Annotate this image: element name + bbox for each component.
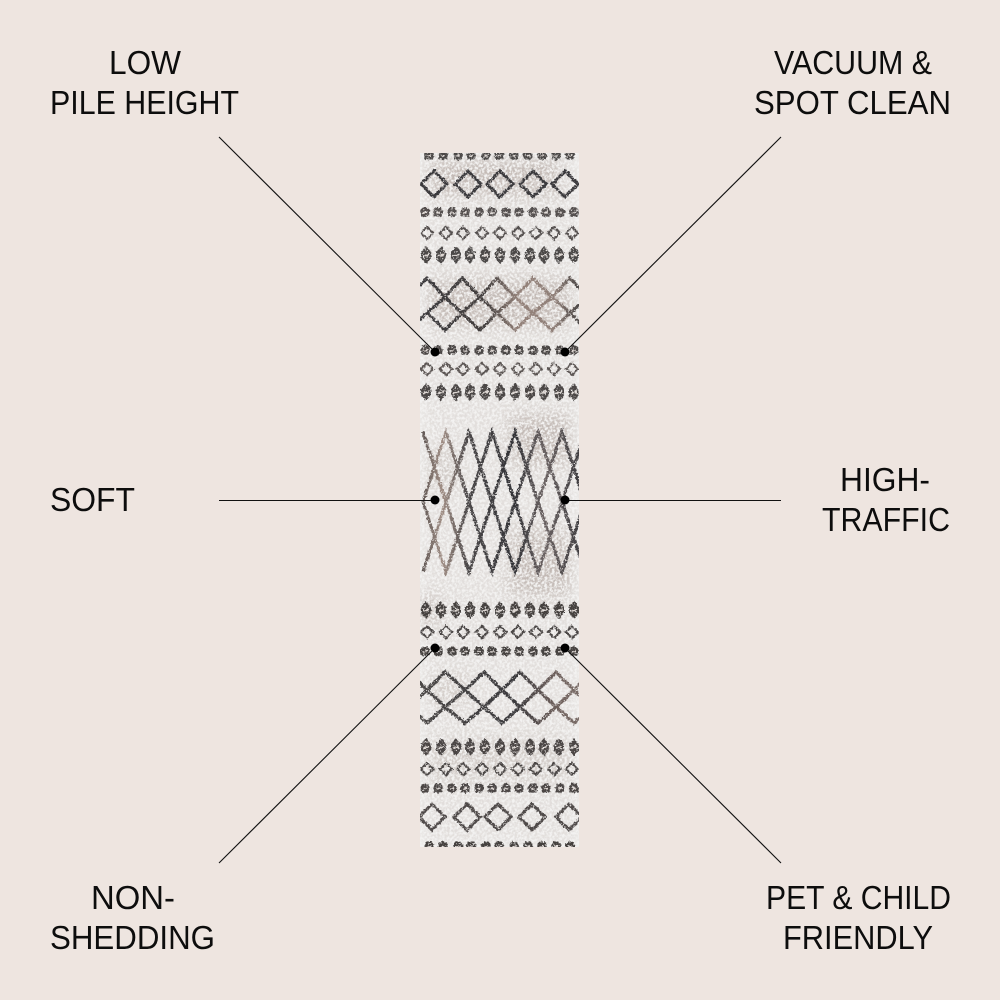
lattice band 2 bbox=[423, 432, 585, 572]
hollow diamonds row 1 bbox=[421, 227, 578, 239]
leader line: low pile height bbox=[219, 137, 440, 356]
bottom edge marks bbox=[424, 840, 576, 847]
dot row 3 bbox=[420, 646, 579, 656]
label: non-shedding bbox=[50, 880, 215, 957]
leader line: non-shedding bbox=[219, 644, 440, 863]
label: high-traffic bbox=[822, 462, 950, 539]
label: high-traffic: TRAFFIC bbox=[822, 502, 950, 539]
label: non-shedding: SHEDDING bbox=[50, 920, 215, 957]
leader line: high-traffic bbox=[560, 496, 781, 504]
lattice band 3 bbox=[409, 672, 592, 723]
dot row 4 bbox=[420, 784, 579, 793]
leader line: soft bbox=[219, 496, 440, 504]
dot row 1 bbox=[420, 208, 579, 217]
filled diamonds row 1 bbox=[421, 246, 579, 264]
label: low pile height: LOW bbox=[109, 45, 181, 82]
label: vacuum and spot clean bbox=[754, 45, 951, 122]
label: vacuum and spot clean: SPOT CLEAN bbox=[754, 85, 951, 122]
label: soft: SOFT bbox=[50, 482, 135, 519]
large diamonds row 1 bbox=[421, 171, 578, 197]
label: pet and child friendly: PET & CHILD bbox=[766, 880, 951, 917]
label: high-traffic: HIGH- bbox=[840, 462, 930, 499]
label: low pile height: PILE HEIGHT bbox=[50, 85, 239, 122]
rug runner bbox=[420, 153, 579, 847]
filled diamonds row 2 bbox=[421, 383, 579, 401]
label: low pile height bbox=[50, 45, 239, 122]
hollow diamonds row 4 bbox=[421, 763, 578, 775]
label: vacuum and spot clean: VACUUM & bbox=[774, 45, 932, 82]
dot row 2 bbox=[420, 346, 579, 355]
filled diamonds row 4 bbox=[421, 738, 579, 756]
large diamonds row 2 bbox=[419, 804, 582, 830]
label: pet and child friendly bbox=[766, 880, 951, 957]
lattice band 1 bbox=[409, 278, 588, 330]
filled diamonds row 3 bbox=[421, 601, 579, 619]
leader line: vacuum and spot clean bbox=[560, 137, 781, 356]
top edge marks bbox=[424, 153, 576, 161]
label: non-shedding: NON- bbox=[91, 880, 175, 917]
hollow diamonds row 3 bbox=[421, 626, 578, 638]
leader line: pet and child friendly bbox=[560, 644, 781, 863]
hollow diamonds row 2 bbox=[421, 363, 578, 375]
label: pet and child friendly: FRIENDLY bbox=[783, 920, 933, 957]
